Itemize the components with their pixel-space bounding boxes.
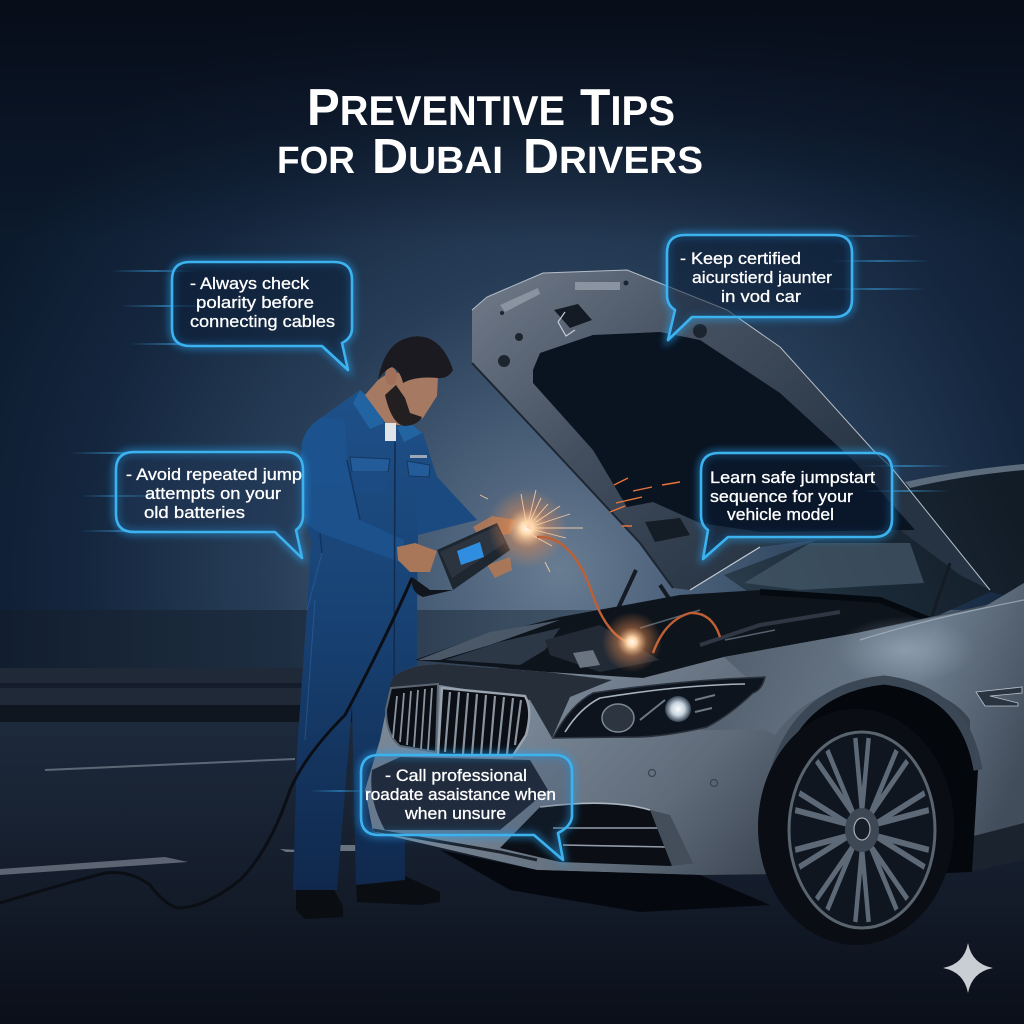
car: engine bay: [415, 590, 985, 678]
car: front body: [365, 583, 1024, 875]
mechanic: hands: [397, 516, 517, 578]
sparks at charger clamp: [480, 478, 680, 572]
black charger cable: [0, 578, 412, 908]
callout: learn jumpstart sequence: Learn safe jumpstart: [710, 468, 875, 487]
callout: avoid repeated jump attempts: [116, 452, 303, 558]
title: DRIVERS: [523, 130, 703, 184]
callout: avoid repeated jump attempts: attempts on your: [145, 484, 281, 503]
orange jumper cables: [537, 537, 720, 653]
callout: keep certified jaunter: in vod car: [721, 287, 801, 306]
charger: screen: [457, 542, 484, 565]
callout: learn jumpstart sequence: [701, 453, 892, 559]
car: front wheel: [758, 680, 978, 945]
mechanic: boots: [296, 876, 440, 919]
callout: call professional assistance: - Call professional: [385, 766, 527, 785]
callout: learn jumpstart sequence: sequence for your: [710, 487, 853, 506]
car: front intake behind callout: [371, 757, 548, 830]
mechanic: [293, 336, 517, 919]
car: [365, 270, 1024, 945]
car: hood prop rods: [615, 563, 950, 622]
car: windshield and roof: [724, 464, 1024, 622]
callout: call professional assistance: roadate asaistance when: [365, 785, 556, 804]
callout: check polarity: [172, 262, 352, 370]
callout: keep certified jaunter: [667, 235, 852, 340]
callout: check polarity: connecting cables: [190, 312, 335, 331]
callout: check polarity: polarity before: [196, 293, 314, 312]
mechanic: coverall: [293, 390, 477, 890]
car: left grille: [386, 684, 438, 752]
title: FOR: [277, 140, 355, 182]
mechanic: head: [365, 336, 453, 441]
callout: call professional assistance: [361, 755, 572, 860]
car: headlight: [553, 677, 765, 738]
title: DUBAI: [372, 130, 503, 184]
light streaks: [70, 235, 950, 792]
callout: keep certified jaunter: aicurstierd jaunter: [692, 268, 832, 287]
icon: four-point sparkle: [943, 943, 993, 993]
charger device: [412, 523, 510, 597]
background: horizon and road: [0, 610, 1024, 1024]
car: front underside shadow: [440, 850, 770, 912]
car: right grille: [438, 688, 529, 757]
title: PREVENTIVE: [307, 79, 565, 137]
callout: learn jumpstart sequence: vehicle model: [727, 505, 834, 524]
callout: avoid repeated jump attempts: old batteries: [144, 503, 245, 522]
car: open hood: [472, 270, 990, 590]
title: TIPS: [580, 79, 675, 137]
callout: keep certified jaunter: - Keep certified: [680, 249, 801, 268]
engine spark glow: [602, 612, 662, 672]
title: [277, 79, 703, 184]
car: lower bumper vent: [373, 770, 718, 866]
callout: check polarity: - Always check: [190, 274, 310, 293]
callout: call professional assistance: when unsure: [404, 804, 506, 823]
callout: avoid repeated jump attempts: - Avoid repeated jump: [126, 465, 302, 484]
